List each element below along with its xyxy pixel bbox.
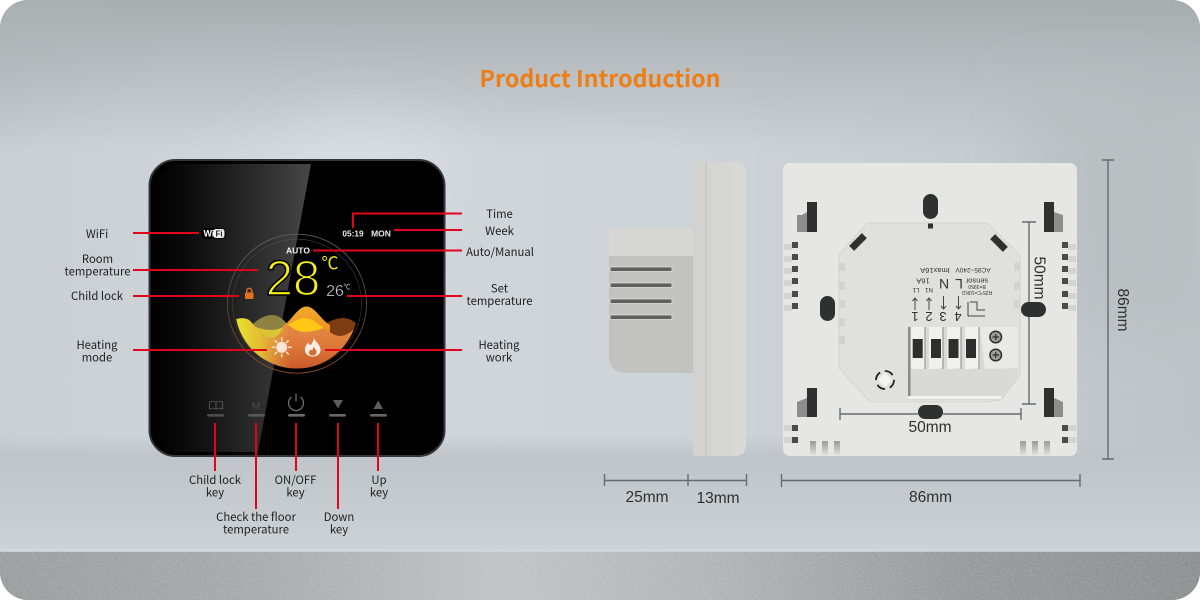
wiring arrows [912, 296, 985, 316]
front plate [693, 162, 746, 456]
terminal screws [990, 331, 1002, 361]
dimension: 86mm vertical [1102, 160, 1131, 459]
label: Child lock key: key [206, 484, 224, 500]
front bowl wave [236, 318, 354, 368]
WiFi icon: Fi [215, 230, 223, 238]
upside-down module markings: 2 [925, 309, 933, 324]
label: Down key: key [330, 522, 348, 538]
upside-down module markings: L [955, 276, 963, 292]
upside-down module markings: 4 [954, 309, 962, 324]
label: ON/OFF key: ON/OFF [275, 472, 316, 488]
back right dark wave [327, 318, 359, 345]
label: Child lock key: Child lock [189, 472, 241, 488]
upside-down module markings: R25°C=10KΩ [962, 289, 992, 295]
label: Set temperature: temperature [467, 293, 532, 309]
label: Time: Time [486, 206, 513, 222]
heating work flame icon [305, 338, 321, 356]
plate seam [705, 163, 707, 456]
knockout circle [876, 371, 894, 389]
upside-down module markings: Imax16A [920, 266, 950, 275]
display rings [228, 234, 366, 373]
back left olive wave [253, 315, 286, 330]
label: Heating mode: mode [82, 350, 112, 366]
upside-down module markings: N [939, 276, 949, 292]
label: Room temperature: temperature [65, 264, 130, 280]
label: Down key: Down [324, 509, 354, 525]
device body [150, 160, 444, 456]
celsius symbol: ℃ [322, 249, 338, 274]
small celsius symbol: ℃ [344, 282, 350, 292]
upside-down module markings: L1 [912, 286, 919, 292]
touch key: up [370, 400, 387, 417]
vent slots [610, 267, 672, 320]
set temperature reading: 26 [326, 283, 344, 300]
upside-down module markings: AC95~240V [955, 266, 991, 273]
room temperature reading: 28 [266, 252, 320, 306]
label: Set temperature: Set [491, 280, 508, 296]
upside-down module markings: 3 [939, 309, 947, 324]
dimension: 13mm depth: 13mm [696, 490, 740, 507]
label: ON/OFF key: key [286, 484, 305, 500]
WiFi icon [201, 228, 226, 239]
upside-down module markings: B=3950 [968, 283, 986, 289]
dimension: 25mm depth: 25mm [625, 489, 669, 506]
label: Check the floor temperature: temperature [223, 522, 289, 538]
label: Up key: key [370, 484, 388, 500]
label: Week: Week [485, 223, 515, 239]
rear block side face [609, 256, 693, 373]
label: Up key: Up [371, 472, 387, 488]
back plate [783, 163, 1077, 456]
dimension: 50mm vertical: 50mm [1030, 256, 1048, 300]
dimension: 50mm horizontal [840, 408, 1021, 436]
dimension: 50mm horizontal: 50mm [908, 419, 952, 436]
yellow wash on bowl left [236, 318, 288, 368]
dimension: 50mm vertical [1022, 222, 1048, 404]
upside-down module markings: 1 [911, 309, 919, 324]
heating mode sun icon [272, 338, 291, 357]
label: Heating work: Heating [478, 337, 520, 353]
weekday readout: MON [371, 228, 391, 238]
touch key: M: M [252, 401, 260, 412]
title: Product Introduction [480, 60, 720, 94]
corner slots [797, 202, 1063, 417]
thermostat side view [609, 162, 746, 456]
dimension: 86mm horizontal: 86mm [909, 489, 952, 506]
callout lines [133, 214, 462, 509]
label: Auto/Manual: Auto/Manual [466, 244, 534, 260]
auto mode text: AUTO [286, 246, 310, 256]
label: WiFi: WiFi [86, 226, 108, 242]
dimension: 25mm depth [604, 474, 688, 506]
inner yellow hump [288, 318, 325, 332]
edge vents [784, 242, 1076, 455]
label: Heating work: work [486, 350, 513, 366]
rear block top face [609, 228, 693, 256]
time readout: 05:19 [342, 228, 364, 238]
upside-down module markings: 16A [916, 276, 930, 286]
label: Child lock: Child lock [71, 288, 124, 304]
upside-down module markings: sensor [965, 276, 988, 286]
yellow band under olive wave [256, 326, 283, 338]
thermostat back view [783, 163, 1077, 456]
heating wave graphic [236, 306, 356, 368]
centre terminal module [839, 223, 1020, 402]
dimension: 13mm depth [688, 474, 746, 507]
dimension: 86mm vertical: 86mm [1114, 288, 1131, 332]
module diagonal slots [849, 224, 1008, 252]
mounting holes [820, 194, 1046, 419]
WiFi icon: Wi [204, 228, 214, 238]
main orange hump [283, 306, 330, 332]
touch key: M [248, 401, 265, 417]
child lock icon [245, 288, 254, 299]
glass glare [153, 164, 311, 452]
touch key: child lock [207, 401, 224, 417]
touch key: down [329, 400, 346, 417]
thermostat front view [150, 160, 444, 456]
upside-down module markings [911, 266, 992, 324]
label: Check the floor temperature: Check the floor [216, 509, 296, 525]
label: Room temperature: Room [82, 251, 113, 267]
terminal block [908, 327, 1018, 400]
upside-down module markings: N1 [925, 286, 933, 292]
module side notches [839, 263, 1020, 344]
touch key: power [288, 394, 305, 417]
dimension: 86mm horizontal [782, 474, 1080, 506]
label: Heating mode: Heating [76, 337, 118, 353]
